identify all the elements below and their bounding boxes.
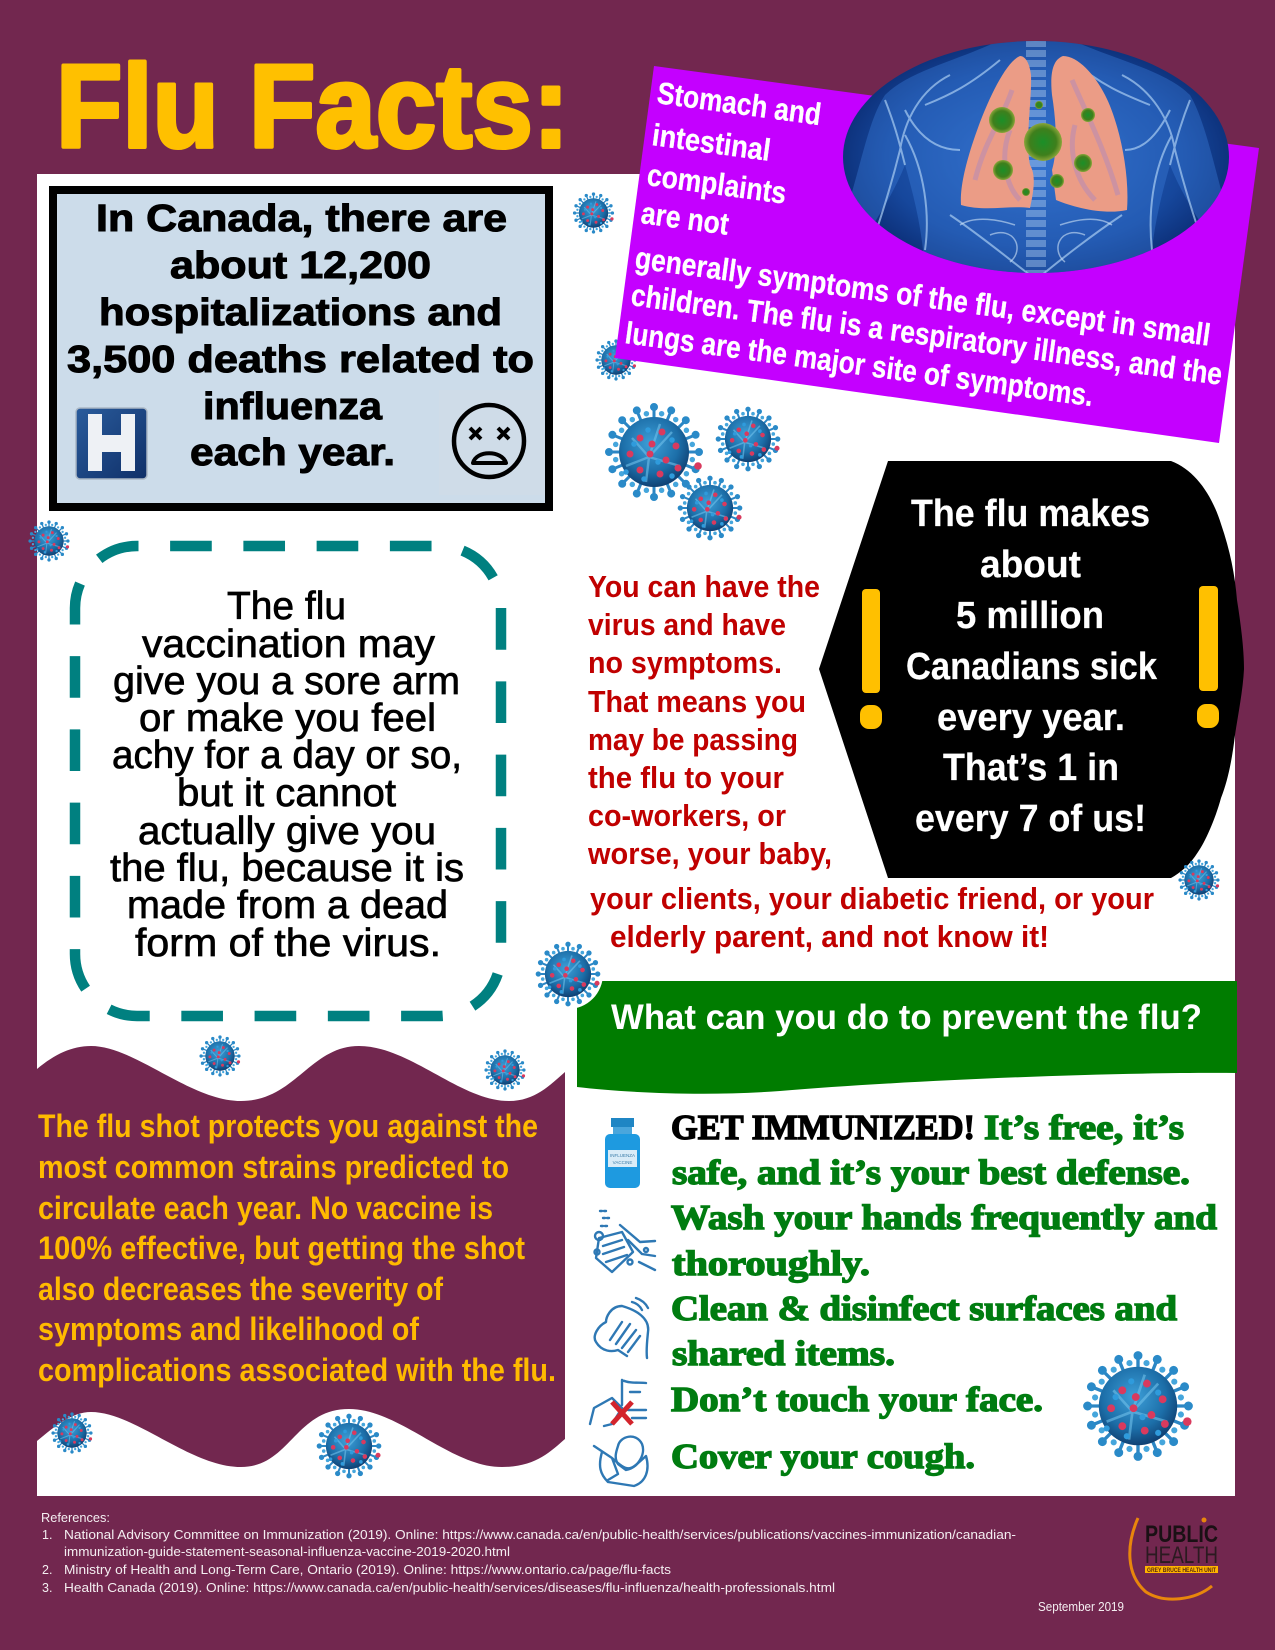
black callout: 5 million: about bbox=[980, 544, 1081, 586]
panel: flu shot: most common strains predicted to bbox=[38, 1149, 509, 1185]
references: 3. bbox=[42, 1581, 52, 1595]
red text: no symptoms: You can have the bbox=[588, 569, 820, 604]
panel: vaccination dashed box: give you a sore arm bbox=[113, 660, 460, 703]
image: lungs with virus bbox=[843, 40, 1229, 285]
references: References: bbox=[41, 1511, 110, 1525]
panel: flu shot: complications associated with the flu. bbox=[38, 1352, 556, 1388]
red text: no symptoms: elderly parent, and not know it! bbox=[610, 919, 1049, 954]
panel: vaccination dashed box: made from a dead bbox=[127, 884, 448, 927]
panel: flu shot: circulate each year. No vaccine is bbox=[38, 1190, 493, 1226]
icon: left exclamation bbox=[860, 589, 882, 729]
icon: vaccine vial: INFLUENZA bbox=[610, 1153, 635, 1158]
prevention list: GET IMMUNIZED! bbox=[671, 1108, 975, 1147]
panel: hospitalizations and deaths: influenza bbox=[203, 386, 383, 428]
references: immunization-guide-statement-seasonal-influenza-vaccine-2019-2020.html bbox=[64, 1545, 510, 1559]
black callout: 5 million: Canadians sick bbox=[906, 646, 1158, 688]
panel: vaccination dashed box: The flu bbox=[227, 585, 346, 628]
icon: washing hands bbox=[594, 1211, 655, 1272]
callout text: lungs are the major site of symptoms. bbox=[623, 315, 1095, 413]
panel: flu shot bbox=[37, 1046, 565, 1467]
icon: sick face bbox=[439, 390, 545, 495]
virus bbox=[486, 1051, 525, 1089]
references bbox=[41, 1511, 1016, 1595]
red text: no symptoms: the flu to your bbox=[588, 760, 784, 795]
prevention list: thoroughly. bbox=[672, 1244, 870, 1283]
callout text bbox=[623, 75, 1224, 413]
virus bbox=[575, 194, 614, 232]
black callout: 5 million bbox=[819, 461, 1244, 878]
black callout: 5 million: The flu makes bbox=[911, 493, 1150, 535]
red text: no symptoms: no symptoms. bbox=[588, 645, 782, 680]
red text: no symptoms: co-workers, or bbox=[588, 798, 786, 833]
red text: no symptoms: That means you bbox=[588, 684, 806, 719]
black callout: 5 million: 5 million bbox=[956, 595, 1104, 637]
prevention list: Don’t touch your face. bbox=[671, 1380, 1043, 1419]
red text: no symptoms: your clients, your diabetic friend, or your bbox=[590, 881, 1154, 916]
virus bbox=[1088, 1356, 1192, 1456]
panel: hospitalizations and deaths: hospitalizations and bbox=[99, 292, 502, 334]
date: September 2019 bbox=[1038, 1600, 1124, 1614]
title: Flu Facts: bbox=[56, 41, 569, 173]
red text: no symptoms: virus and have bbox=[588, 607, 786, 642]
panel: vaccination dashed box: achy for a day or so, bbox=[112, 734, 462, 777]
prevention list: safe, and it’s your best defense. bbox=[672, 1153, 1190, 1192]
panel: hospitalizations and deaths bbox=[53, 190, 549, 507]
prevention list: It’s free, it’s bbox=[984, 1108, 1184, 1147]
references: Health Canada (2019). Online: https://www.canada.ca/en/public-health/services/diseases/flu-influenza/health-professionals.html bbox=[64, 1581, 835, 1595]
panel: flu shot: The flu shot protects you against the bbox=[38, 1108, 538, 1144]
callout text: intestinal bbox=[650, 117, 773, 168]
virus with white halo bbox=[533, 939, 603, 1009]
panel: flu shot: 100% effective, but getting the shot bbox=[38, 1230, 525, 1266]
panel: hospitalizations and deaths: each year. bbox=[190, 432, 395, 474]
icon: cleaning surface bbox=[595, 1298, 648, 1358]
icon: right exclamation bbox=[1197, 586, 1219, 728]
prevention list: Cover your cough. bbox=[671, 1437, 975, 1476]
panel: hospitalizations and deaths: 3,500 deaths related to bbox=[67, 339, 534, 381]
prevention list: Wash your hands frequently and bbox=[671, 1198, 1218, 1237]
logo: public health: HEALTH bbox=[1145, 1542, 1218, 1569]
virus cluster bbox=[609, 407, 780, 538]
panel: hospitalizations and deaths: In Canada, there are bbox=[96, 198, 507, 240]
prevention list bbox=[671, 1108, 1218, 1476]
panel: flu shot: symptoms and likelihood of bbox=[38, 1311, 419, 1347]
panel: vaccination dashed box: but it cannot bbox=[177, 772, 396, 815]
icon: vaccine vial: VACCINE bbox=[613, 1160, 632, 1165]
virus bbox=[201, 1037, 240, 1075]
heading banner: prevention bbox=[577, 981, 1237, 1094]
virus bbox=[53, 1414, 92, 1452]
black callout: 5 million: every 7 of us! bbox=[915, 798, 1146, 840]
references: 2. bbox=[42, 1563, 52, 1577]
icon: do not touch face bbox=[590, 1380, 646, 1426]
prevention list: shared items. bbox=[672, 1334, 895, 1373]
panel: vaccination dashed box: the flu, because it is bbox=[110, 847, 464, 890]
icon: vaccine vial bbox=[605, 1118, 640, 1188]
callout text: are not bbox=[639, 195, 731, 242]
panel: vaccination dashed box bbox=[75, 546, 501, 1016]
red text: no symptoms: may be passing bbox=[588, 722, 798, 757]
panel: vaccination dashed box: actually give you bbox=[138, 810, 436, 853]
icon: hospital sign bbox=[76, 408, 147, 479]
virus bbox=[1180, 861, 1219, 899]
logo: public health: GREY BRUCE HEALTH UNIT bbox=[1147, 1568, 1216, 1574]
panel: vaccination dashed box: vaccination may bbox=[142, 623, 436, 666]
panel: vaccination dashed box: or make you feel bbox=[139, 697, 436, 740]
red text: no symptoms bbox=[587, 569, 1154, 954]
heading banner: prevention: What can you do to prevent the flu? bbox=[611, 998, 1202, 1037]
logo: public health bbox=[1130, 1518, 1218, 1599]
references: Ministry of Health and Long-Term Care, Ontario (2019). Online: https://www.ontario.ca/page/flu-facts bbox=[64, 1563, 671, 1577]
panel: stomach symptoms callout bbox=[615, 40, 1259, 443]
prevention list: Clean & disinfect surfaces and bbox=[671, 1289, 1178, 1328]
virus bbox=[319, 1416, 381, 1476]
panel: hospitalizations and deaths: about 12,200 bbox=[170, 245, 431, 287]
virus bbox=[597, 341, 636, 379]
virus bbox=[30, 522, 69, 560]
panel: vaccination dashed box: form of the virus. bbox=[135, 922, 441, 965]
red text: no symptoms: worse, your baby, bbox=[587, 836, 832, 871]
references: National Advisory Committee on Immunization (2019). Online: https://www.canada.ca/en/public-health/services/publications/vaccines-immunization/canadian- bbox=[64, 1528, 1016, 1542]
references: 1. bbox=[42, 1528, 52, 1542]
black callout: 5 million: every year. bbox=[937, 697, 1125, 739]
panel: flu shot: also decreases the severity of bbox=[38, 1271, 443, 1307]
callout text: complaints bbox=[645, 157, 788, 211]
icon: covering cough bbox=[594, 1437, 648, 1486]
black callout: 5 million: That’s 1 in bbox=[943, 747, 1119, 789]
white content panel bbox=[37, 174, 1235, 1496]
logo: public health: PUBLIC bbox=[1145, 1521, 1218, 1548]
callout text: Stomach and bbox=[655, 75, 823, 132]
